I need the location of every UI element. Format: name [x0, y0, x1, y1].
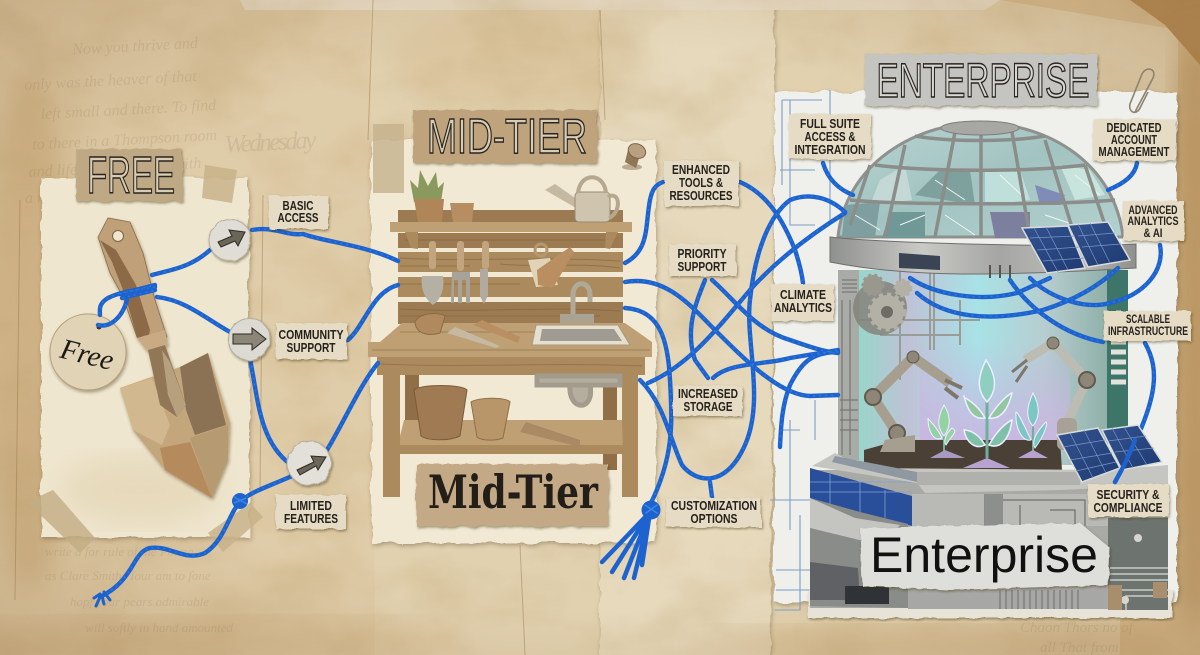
- handwriting: bottom left letter: write a for rule of the Ponna: [45, 544, 194, 559]
- icon: free paper tag: Free: [56, 333, 117, 377]
- handwriting: top left letter: a means: [25, 187, 78, 207]
- handwriting: bottom right note: [1020, 620, 1135, 655]
- label: Security and Compliance: [1088, 484, 1169, 517]
- label: Enhanced Tools and Resources: TOOLS &: [679, 175, 723, 190]
- icon: solar panels on base: [1057, 425, 1162, 482]
- tape: bottom right: [208, 503, 263, 552]
- watering can: [545, 177, 618, 222]
- label: Limited Features: FEATURES: [284, 511, 338, 526]
- label: Community Support: COMMUNITY: [278, 327, 344, 342]
- tape: bottom left: [27, 490, 95, 553]
- icon: push pin: [622, 141, 648, 170]
- label: Increased Storage: INCREASED: [678, 386, 738, 401]
- panel: free tier paper: [27, 165, 263, 553]
- torn grey layers: [810, 498, 908, 608]
- handwriting: bottom left letter: will softly in hand amounted: [85, 620, 234, 635]
- label: Dedicated Account Management: [1093, 119, 1176, 161]
- label: Enterprise bottom: Enterprise: [870, 527, 1098, 583]
- label: Priority Support: [669, 244, 736, 276]
- heading: ENTERPRISE: ENTERPRISE: [876, 55, 1090, 108]
- label: Scalable Infrastructure: [1104, 311, 1191, 341]
- right column: [1107, 270, 1128, 430]
- icon: solar panels on dome: [1022, 222, 1130, 273]
- label: Scalable Infrastructure: SCALABLE: [1126, 312, 1170, 326]
- icon: cardboard trowel: [98, 218, 230, 498]
- label: Increased Storage: [673, 386, 742, 416]
- handwriting: top left letter: and life away hinds of with: [28, 155, 202, 181]
- security rope strand over solar panel: [1115, 440, 1135, 482]
- table-top tools: [415, 314, 520, 348]
- heading: FREE: FREE: [87, 147, 175, 205]
- glowing plants: [928, 360, 1048, 468]
- label: Mid-Tier bottom: [416, 464, 608, 526]
- illustration: metal and circuit collage base: [810, 453, 1168, 610]
- label: Climate Analytics: [771, 284, 834, 321]
- metal scrap: [912, 494, 1109, 526]
- dome glass: [838, 121, 1123, 238]
- label: Priority Support: SUPPORT: [678, 259, 727, 274]
- top shelf: [390, 222, 632, 249]
- thin glass highlights: [855, 175, 1100, 235]
- lower shelf: [400, 420, 623, 454]
- ribbed metal strip: [908, 585, 1110, 609]
- back boards: [398, 210, 623, 324]
- label: Advanced Analytics and AI: & AI: [1144, 226, 1162, 240]
- tape: mid-tier top left: [373, 124, 404, 193]
- label: Dedicated Account Management: MANAGEMENT: [1098, 144, 1170, 159]
- label: Security and Compliance: COMPLIANCE: [1094, 500, 1163, 515]
- label: Basic Access: BASIC: [282, 198, 314, 213]
- handwriting: bottom left letter: [45, 544, 234, 635]
- handwriting: top left letter: Now you thrive and: [71, 35, 199, 58]
- hand tools: [422, 241, 574, 305]
- handwriting: top left letter: to there in a Thompson room: [32, 127, 217, 154]
- label: Mid-Tier bottom: Mid-Tier: [428, 465, 599, 519]
- label: Security and Compliance: SECURITY &: [1096, 487, 1160, 502]
- panel: mid-tier paper: [371, 124, 656, 543]
- icon: rope knot and tassel: [602, 500, 660, 578]
- base ledge: [812, 453, 1168, 493]
- handwriting: bottom right note: Chaon Thors no of: [1020, 620, 1135, 636]
- label: Full Suite Access and Integration: FULL SUITE: [800, 116, 860, 131]
- handwriting: top left letter: left small and there. To find: [40, 97, 218, 123]
- label: Basic Access: [269, 196, 328, 229]
- left robot arm: [865, 351, 962, 452]
- interior pipes: [858, 270, 980, 380]
- label: Full Suite Access and Integration: INTEGRATION: [794, 142, 866, 157]
- icon: arrow badge community support: [228, 318, 270, 360]
- icon: free paper tag: [50, 314, 126, 390]
- dome cap: [941, 121, 1019, 135]
- sink drain: [537, 376, 620, 405]
- greenhouse interior: [858, 270, 1108, 465]
- connector: ropes from free tier: [98, 229, 398, 597]
- label: Enhanced Tools and Resources: RESOURCES: [670, 188, 733, 203]
- label: Customization Options: [666, 498, 761, 527]
- label: Enhanced Tools and Resources: ENHANCED: [672, 162, 730, 177]
- plant pots: [410, 170, 474, 222]
- handwriting: bottom left letter: as Clare Smiths Iour am to fone: [45, 568, 211, 583]
- heading: ENTERPRISE: [865, 54, 1097, 108]
- metal collar: [830, 237, 1136, 278]
- label: Basic Access: ACCESS: [278, 210, 319, 225]
- sink and faucet: [532, 284, 630, 345]
- interior lilac glow: [920, 340, 1070, 450]
- label: Full Suite Access and Integration: ACCESS &: [804, 129, 856, 144]
- label: Limited Features: LIMITED: [290, 498, 332, 513]
- paperclip: [1130, 69, 1154, 112]
- lower shelf pots: [414, 386, 580, 447]
- label: Climate Analytics: ANALYTICS: [774, 300, 832, 315]
- circuit board: [1108, 518, 1168, 610]
- label: Climate Analytics: CLIMATE: [780, 287, 826, 302]
- collage backing: [810, 470, 1168, 608]
- illustration: glass dome greenhouse: [830, 121, 1136, 470]
- label: Advanced Analytics and AI: [1123, 201, 1184, 241]
- dome glass frame: [850, 126, 1115, 237]
- legs: [383, 375, 638, 497]
- tape: top right: [202, 165, 237, 203]
- label: Customization Options: CUSTOMIZATION: [671, 498, 757, 513]
- label: Customization Options: OPTIONS: [690, 511, 738, 526]
- label: Increased Storage: STORAGE: [684, 399, 733, 414]
- label: Community Support: [276, 323, 347, 359]
- handwriting: top left letter: Wednesday: [224, 127, 318, 159]
- right robot arm: [1012, 337, 1095, 450]
- label: Advanced Analytics and AI: ADVANCED: [1128, 203, 1178, 217]
- panel: enterprise blueprint paper: [770, 69, 1177, 618]
- heading: MID-TIER: MID-TIER: [427, 110, 587, 164]
- blueprint scrap: [810, 468, 912, 526]
- connector: ropes in enterprise dome: [823, 163, 1161, 482]
- illustration: potting bench: [368, 170, 652, 497]
- table top and apron: [368, 323, 652, 375]
- gears: [853, 275, 911, 335]
- label: Full Suite Access and Integration: [789, 114, 871, 159]
- label: Priority Support: PRIORITY: [678, 246, 727, 261]
- handwriting: top left letter: [17, 29, 320, 207]
- icon: arrow badge limited features: [287, 441, 331, 485]
- label: Community Support: SUPPORT: [286, 340, 336, 355]
- connector: ropes between mid-tier and enterprise: [625, 182, 845, 505]
- label: Advanced Analytics and AI: ANALYTICS: [1128, 214, 1178, 228]
- handwriting: bottom left letter: hopf your pears admirable: [70, 594, 209, 609]
- icon: arrow badge basic access: [209, 219, 251, 261]
- torn white strip under collage: [808, 590, 1173, 618]
- icon: rope knot on free line: [232, 493, 248, 509]
- label: Limited Features: [276, 495, 346, 529]
- handwriting: top left letter: only was the heaver of that: [24, 68, 198, 94]
- icon: rope tail fray: [94, 592, 110, 606]
- label: Dedicated Account Management: DEDICATED: [1106, 120, 1162, 135]
- heading: FREE: [76, 147, 182, 205]
- soil: [864, 440, 1062, 470]
- label: Enhanced Tools and Resources: [664, 161, 739, 206]
- left column: [838, 270, 859, 460]
- label: Dedicated Account Management: ACCOUNT: [1111, 132, 1157, 147]
